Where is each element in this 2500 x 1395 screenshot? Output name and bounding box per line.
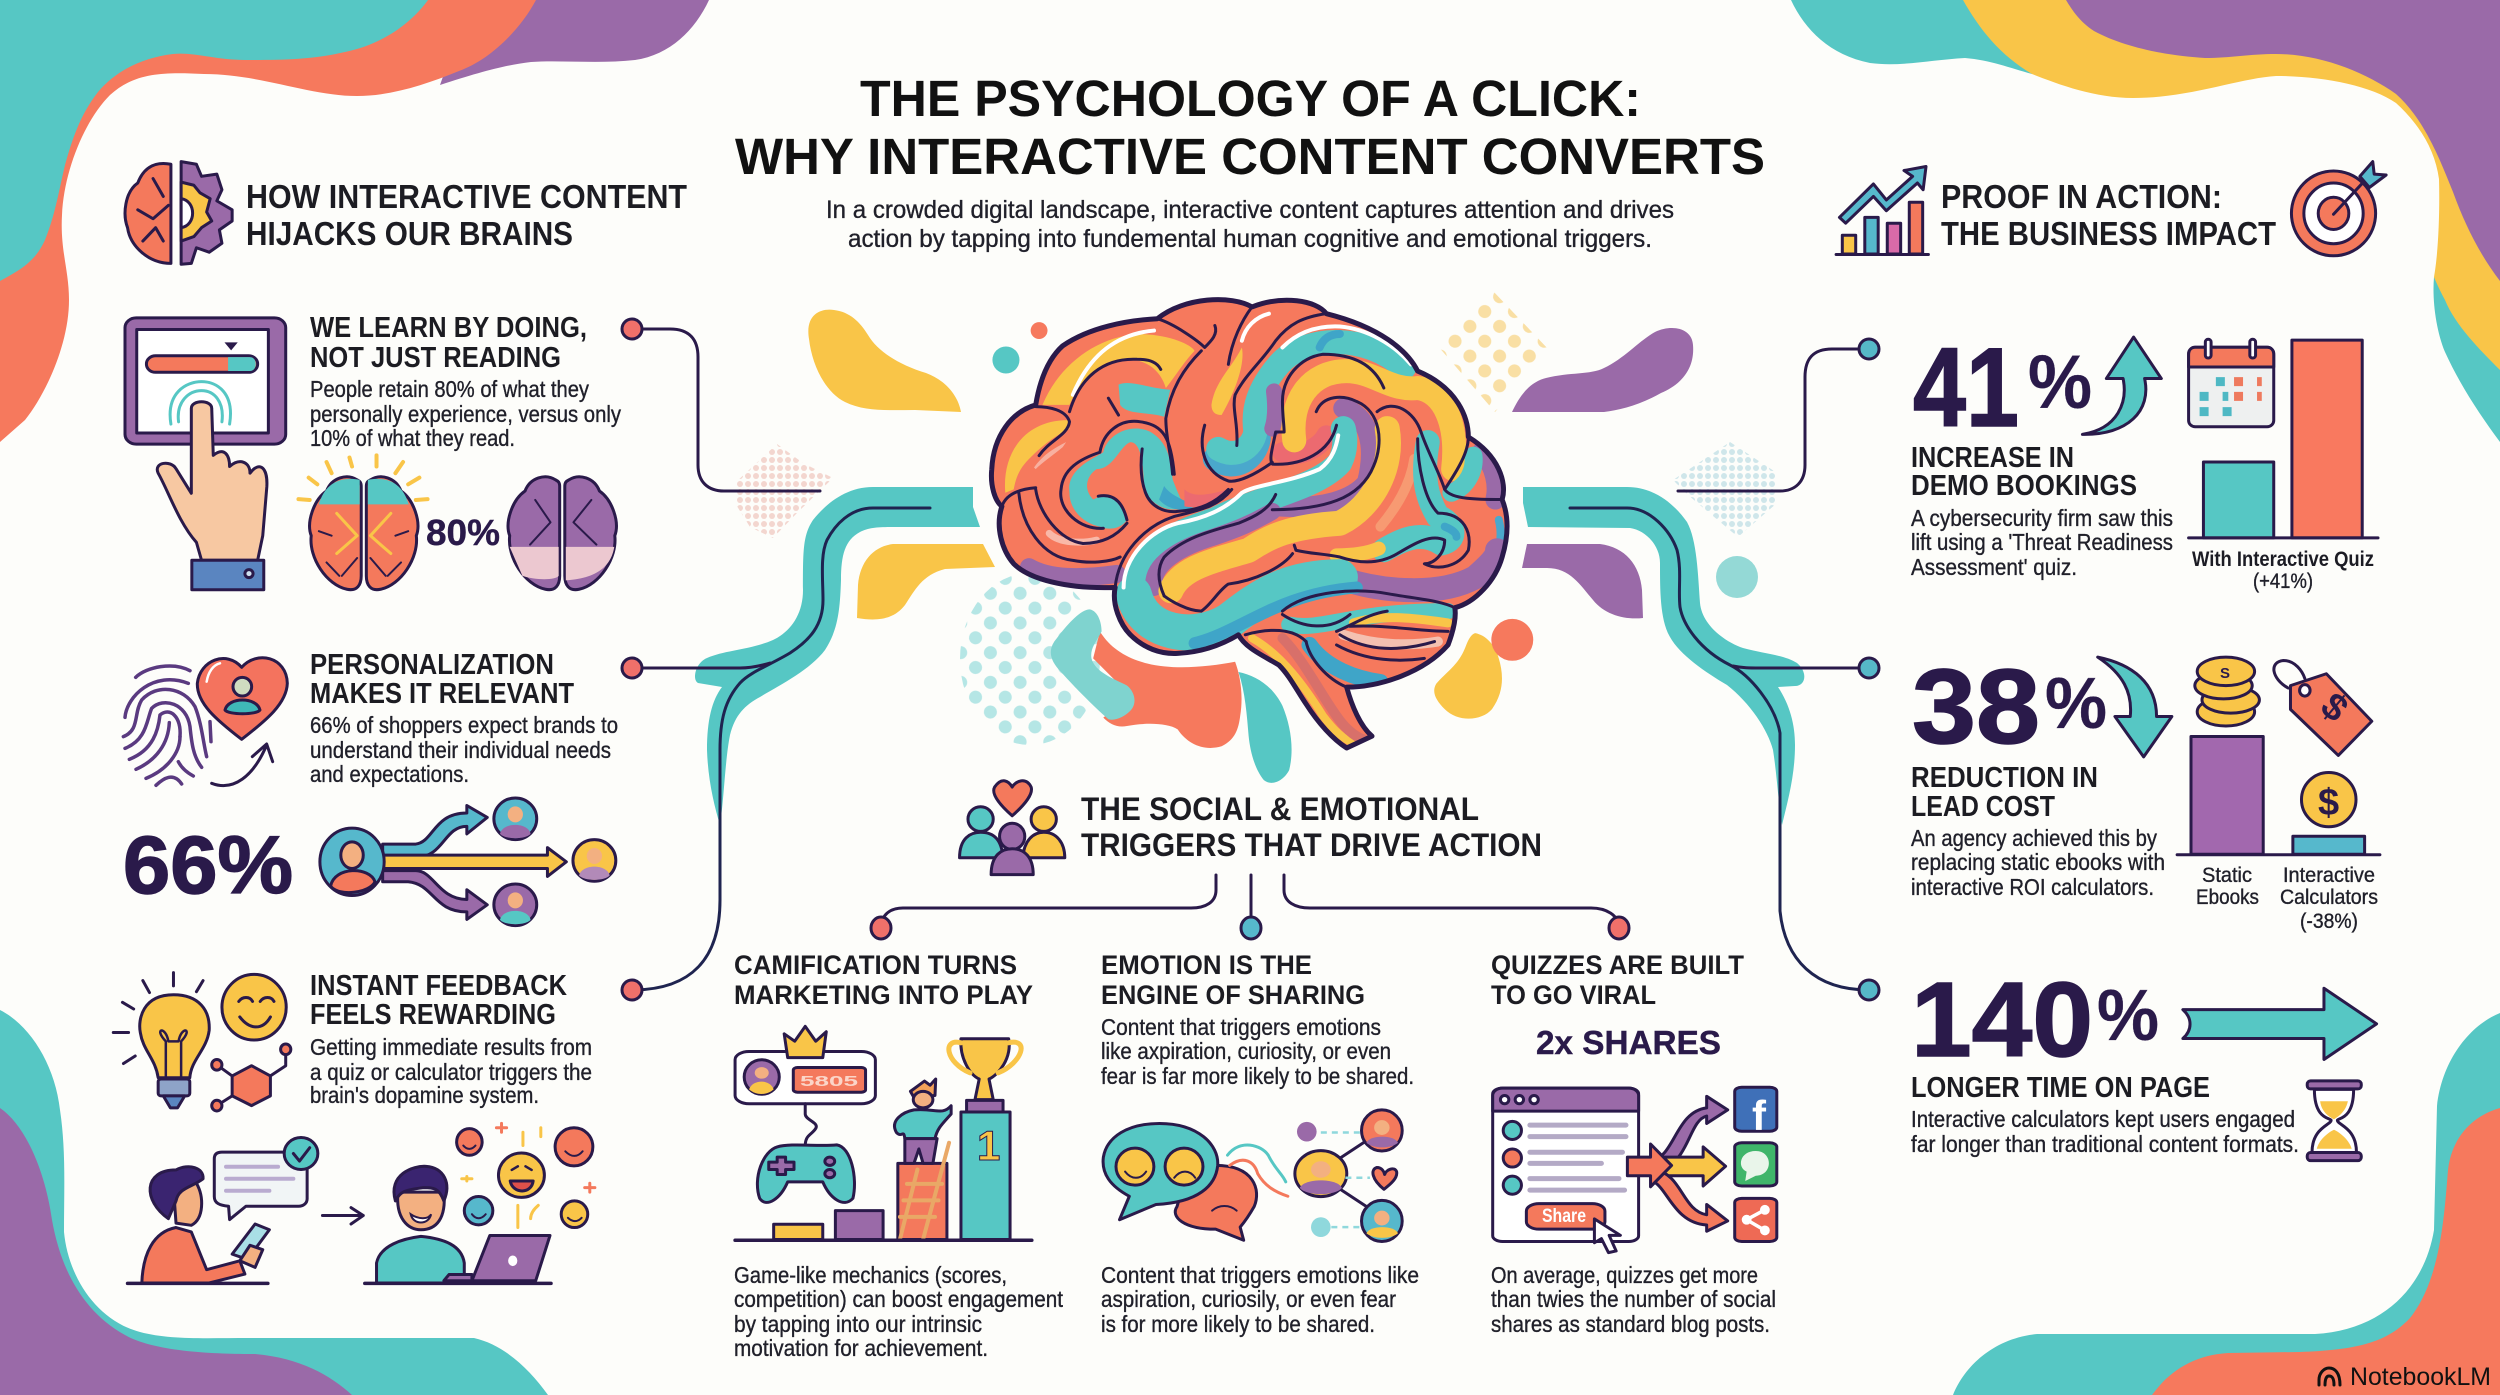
panel: 41 percent increase: Assessment' quiz. bbox=[1911, 554, 2077, 580]
panel: personalization makes it relevant: PERSONALIZATION bbox=[310, 649, 554, 681]
icon: fingerprint bbox=[123, 666, 211, 785]
panel: 140 percent longer time: Interactive calculators kept users engaged bbox=[1911, 1106, 2295, 1132]
icon: personalised routes to avatars bbox=[320, 798, 616, 926]
panel: we learn by doing: People retain 80% of what they bbox=[310, 376, 589, 402]
panel: 38 percent reduction: Static bbox=[2202, 864, 2252, 887]
panel: personalization makes it relevant: 66% bbox=[123, 820, 293, 911]
panel: 41 percent increase: lift using a 'Threat Readiness bbox=[1911, 529, 2173, 555]
section heading: how interactive content hijacks our brains bbox=[125, 162, 687, 264]
panel: 140 percent longer time: % bbox=[2097, 976, 2159, 1056]
section heading: proof in action bbox=[1836, 162, 2386, 256]
panel: 140 percent longer time: far longer than traditional content formats. bbox=[1911, 1131, 2299, 1157]
section heading: the social and emotional triggers: TRIGGERS THAT DRIVE ACTION bbox=[1081, 827, 1542, 863]
panel: instant feedback feels rewarding: a quiz or calculator triggers the bbox=[310, 1059, 592, 1085]
section heading: the social and emotional triggers bbox=[960, 781, 1542, 875]
panel: personalization makes it relevant: 66% of shoppers expect brands to bbox=[310, 712, 618, 738]
panel: quizzes are built to go viral: Share bbox=[1542, 1206, 1586, 1227]
panel: 38 percent reduction: (-38%) bbox=[2300, 910, 2358, 933]
panel: quizzes are built to go viral: On average, quizzes get more bbox=[1491, 1262, 1758, 1288]
panel: personalization makes it relevant bbox=[123, 649, 618, 926]
panel: instant feedback feels rewarding: INSTANT FEEDBACK bbox=[310, 970, 567, 1002]
panel: 38 percent reduction: 38 bbox=[1912, 648, 2040, 766]
bar chart: lead cost with coins and price tag bbox=[2177, 657, 2380, 855]
panel: quizzes are built to go viral: than twies the number of social bbox=[1491, 1286, 1776, 1312]
panel: quizzes are built to go viral: 2x SHARES bbox=[1536, 1024, 1721, 1061]
panel: we learn by doing: 80% bbox=[426, 512, 500, 553]
panel: 41 percent increase: % bbox=[2028, 340, 2092, 425]
decorative corner: top left bbox=[0, 0, 709, 442]
panel: gamification: Game-like mechanics (scores, bbox=[734, 1262, 1007, 1288]
icon: tablet with tapping hand bbox=[125, 318, 286, 590]
panel: 41 percent increase bbox=[1911, 325, 2378, 593]
panel: 38 percent reduction: interactive ROI calculators. bbox=[1911, 874, 2154, 900]
brain body bbox=[991, 300, 1507, 748]
subtitle: In a crowded digital landscape, interactive content captures attention and drives bbox=[826, 196, 1674, 224]
panel: gamification: motivation for achievement. bbox=[734, 1335, 988, 1361]
panel: 41 percent increase: A cybersecurity firm saw this bbox=[1911, 505, 2173, 531]
panel: quizzes are built to go viral: QUIZZES ARE BUILT bbox=[1491, 950, 1744, 980]
panel: instant feedback feels rewarding: FEELS REWARDING bbox=[310, 999, 556, 1031]
panel: quizzes are built to go viral bbox=[1491, 950, 1777, 1337]
panel: gamification bbox=[734, 950, 1064, 1361]
panel: 38 percent reduction: LEAD COST bbox=[1911, 791, 2055, 823]
icon: brain and gear bbox=[125, 162, 232, 264]
panel: gamification: 5805 bbox=[800, 1073, 858, 1090]
decorative corner: bottom left bbox=[0, 1010, 548, 1395]
icon: downward arrow bbox=[2098, 657, 2172, 757]
subtitle: action by tapping into fundemental human cognitive and emotional triggers. bbox=[848, 225, 1652, 253]
panel: gamification: MARKETING INTO PLAY bbox=[734, 980, 1033, 1010]
panel: quizzes are built to go viral: f bbox=[1752, 1092, 1767, 1139]
panel: 38 percent reduction: REDUCTION IN bbox=[1911, 762, 2098, 794]
icon: upward arrow bbox=[2082, 337, 2161, 434]
panel: we learn by doing: personally experience, versus only bbox=[310, 401, 621, 427]
subtitle bbox=[826, 196, 1674, 253]
panel: 38 percent reduction: % bbox=[2045, 664, 2107, 744]
panel: instant feedback feels rewarding: brain's dopamine system. bbox=[310, 1082, 539, 1108]
panel: 41 percent increase: (+41%) bbox=[2253, 570, 2313, 593]
title bbox=[735, 70, 1765, 185]
panel: 38 percent reduction bbox=[1911, 648, 2380, 933]
icon: rising bar chart bbox=[1836, 167, 1928, 254]
icon: long right arrow bbox=[2183, 988, 2377, 1059]
panel: we learn by doing bbox=[125, 312, 621, 590]
icon: emotion speech bubbles and social network bbox=[1103, 1110, 1402, 1242]
title: WHY INTERACTIVE CONTENT CONVERTS bbox=[735, 128, 1765, 185]
icon: lightbulb, smiley and dopamine molecule bbox=[113, 973, 291, 1111]
panel: gamification: CAMIFICATION TURNS bbox=[734, 950, 1017, 980]
section heading: how interactive content hijacks our brains: HOW INTERACTIVE CONTENT bbox=[246, 178, 687, 215]
section heading: proof in action: THE BUSINESS IMPACT bbox=[1941, 215, 2276, 252]
panel: gamification: competition) can boost engagement bbox=[734, 1286, 1064, 1312]
title: THE PSYCHOLOGY OF A CLICK: bbox=[860, 70, 1641, 127]
panel: personalization makes it relevant: MAKES IT RELEVANT bbox=[310, 678, 574, 710]
panel: gamification: 1 bbox=[977, 1122, 1000, 1169]
icon: person with quiz on phone becoming happy person bbox=[128, 1123, 595, 1283]
connectors from social heading to columns bbox=[871, 875, 1629, 939]
panel: 140 percent longer time bbox=[1911, 961, 2377, 1161]
panel: 140 percent longer time: LONGER TIME ON PAGE bbox=[1911, 1072, 2210, 1104]
icon: brain with 10 percent active bbox=[508, 477, 616, 590]
icon: game controller, score panel, ladder and trophy podium bbox=[735, 1026, 1032, 1240]
decorative corner: top right bbox=[1791, 0, 2500, 442]
panel: emotion is the engine of sharing: like axpiration, curiosity, or even bbox=[1101, 1038, 1391, 1064]
bar chart: demo bookings with calendar bbox=[2189, 339, 2378, 538]
section heading: the social and emotional triggers: THE SOCIAL & EMOTIONAL bbox=[1081, 791, 1479, 827]
icon: hourglass bbox=[2307, 1081, 2361, 1161]
panel: emotion is the engine of sharing bbox=[1101, 950, 1419, 1337]
panel: emotion is the engine of sharing: Content that triggers emotions like bbox=[1101, 1262, 1419, 1288]
panel: instant feedback feels rewarding bbox=[113, 970, 595, 1283]
panel: emotion is the engine of sharing: fear is far more likely to be shared. bbox=[1101, 1063, 1414, 1089]
panel: emotion is the engine of sharing: ENGINE OF SHARING bbox=[1101, 980, 1365, 1010]
central brain illustration bbox=[991, 300, 1533, 783]
panel: emotion is the engine of sharing: is for more likely to be shared. bbox=[1101, 1311, 1375, 1337]
NotebookLM logo: NotebookLM bbox=[2350, 1363, 2491, 1391]
panel: quizzes are built to go viral: TO GO VIRAL bbox=[1491, 980, 1656, 1010]
panel: 38 percent reduction: Calculators bbox=[2280, 886, 2378, 909]
central decorative blobs bbox=[735, 291, 1777, 745]
panel: 41 percent increase: 41 bbox=[1913, 325, 2019, 450]
right teal ribbon and connectors bbox=[1523, 339, 1879, 1000]
icon: curved arrow bbox=[212, 744, 273, 786]
icon: brain with 80 percent active bbox=[298, 455, 428, 590]
panel: emotion is the engine of sharing: EMOTION IS THE bbox=[1101, 950, 1312, 980]
section heading: how interactive content hijacks our brains: HIJACKS OUR BRAINS bbox=[246, 215, 573, 252]
panel: we learn by doing: WE LEARN BY DOING, bbox=[310, 312, 587, 344]
panel: emotion is the engine of sharing: Content that triggers emotions bbox=[1101, 1014, 1381, 1040]
panel: instant feedback feels rewarding: Getting immediate results from bbox=[310, 1034, 592, 1060]
panel: quizzes are built to go viral: shares as standard blog posts. bbox=[1491, 1311, 1770, 1337]
panel: personalization makes it relevant: understand their individual needs bbox=[310, 737, 611, 763]
panel: personalization makes it relevant: and expectations. bbox=[310, 761, 469, 787]
panel: 38 percent reduction: $ bbox=[2312, 685, 2356, 731]
panel: 41 percent increase: With Interactive Quiz bbox=[2192, 548, 2374, 571]
icon: group of people with heart bbox=[960, 781, 1065, 875]
panel: 38 percent reduction: Ebooks bbox=[2196, 886, 2259, 909]
panel: 38 percent reduction: $ bbox=[2318, 782, 2339, 824]
panel: 38 percent reduction: An agency achieved this by bbox=[1911, 825, 2157, 851]
panel: emotion is the engine of sharing: aspiration, curiosily, or even fear bbox=[1101, 1286, 1396, 1312]
panel: 38 percent reduction: S bbox=[2220, 665, 2230, 682]
panel: we learn by doing: 10% of what they read. bbox=[310, 425, 515, 451]
panel: we learn by doing: NOT JUST READING bbox=[310, 342, 561, 374]
panel: 38 percent reduction: Interactive bbox=[2283, 864, 2375, 887]
panel: 38 percent reduction: replacing static ebooks with bbox=[1911, 849, 2165, 875]
panel: 41 percent increase: INCREASE IN bbox=[1911, 442, 2074, 474]
panel: 140 percent longer time: 140 bbox=[1911, 961, 2093, 1079]
blobs beneath brain bbox=[992, 322, 1533, 783]
panel: gamification: by tapping into our intrinsic bbox=[734, 1311, 982, 1337]
decorative corner: bottom right bbox=[1953, 1013, 2500, 1395]
section heading: proof in action: PROOF IN ACTION: bbox=[1941, 178, 2222, 215]
icon: quiz browser window sharing to social apps bbox=[1493, 1087, 1777, 1253]
panel: 41 percent increase: DEMO BOOKINGS bbox=[1911, 470, 2137, 502]
left teal ribbon and connectors bbox=[622, 319, 980, 1000]
icon: target with arrow bbox=[2291, 162, 2386, 256]
icon: heart with avatar bbox=[197, 658, 287, 739]
